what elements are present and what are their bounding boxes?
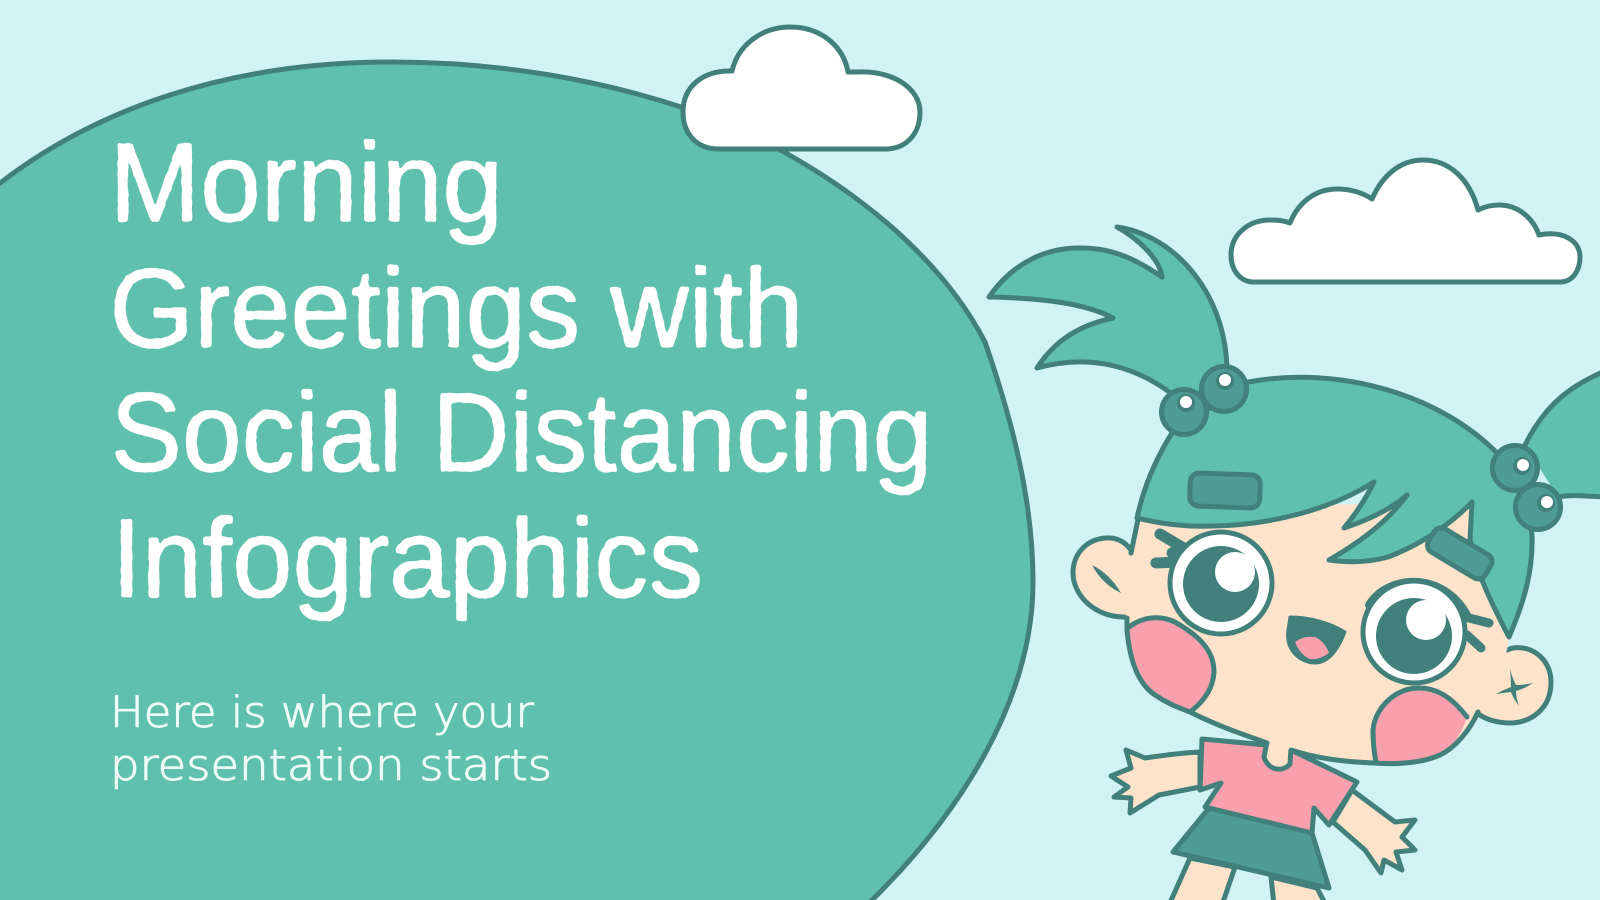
title: Greetings with xyxy=(110,246,804,371)
hair clip left xyxy=(1189,473,1261,508)
left cheek outline xyxy=(1129,618,1214,712)
title: Social Distancing xyxy=(110,370,932,495)
subtitle xyxy=(110,688,552,791)
left ear opening xyxy=(1092,565,1121,593)
skirt xyxy=(1173,808,1329,888)
panel: green blob xyxy=(0,62,1033,900)
left ear xyxy=(1073,538,1133,617)
left eye highlight xyxy=(1215,552,1255,592)
illustration: girl character xyxy=(989,227,1600,900)
right ear xyxy=(1476,648,1551,723)
right cheek xyxy=(1373,688,1467,764)
right ear mark xyxy=(1496,669,1533,706)
title: Infographics xyxy=(112,496,703,621)
icon: cloud left xyxy=(683,27,920,149)
left arm xyxy=(1111,750,1200,813)
right eye upper lid xyxy=(1369,582,1467,615)
left ponytail xyxy=(989,227,1227,400)
left cheek xyxy=(1128,618,1214,712)
right eye highlight xyxy=(1406,600,1446,640)
face outline xyxy=(1127,510,1478,764)
title: Morning xyxy=(110,120,503,245)
tongue xyxy=(1295,637,1329,659)
face xyxy=(1126,500,1515,764)
right iris xyxy=(1376,598,1452,674)
hair clip right xyxy=(1425,525,1495,582)
right eye xyxy=(1363,581,1465,683)
icon: cloud right xyxy=(1231,160,1580,282)
right arm xyxy=(1333,790,1415,873)
title xyxy=(110,120,932,621)
right cheek outline xyxy=(1373,688,1467,763)
left iris xyxy=(1183,546,1259,622)
neck xyxy=(1264,742,1291,769)
front hair xyxy=(1137,377,1532,637)
right leg xyxy=(1271,877,1326,900)
subtitle: presentation starts xyxy=(110,741,552,791)
right ponytail xyxy=(1525,369,1600,497)
left eye xyxy=(1170,532,1272,634)
right eyelashes xyxy=(1465,617,1489,648)
subtitle: Here is where your xyxy=(110,688,534,738)
left eyelashes xyxy=(1156,534,1182,563)
bobbles xyxy=(1162,366,1560,530)
mouth xyxy=(1288,617,1345,663)
shirt xyxy=(1200,739,1357,833)
left leg xyxy=(1169,858,1235,900)
